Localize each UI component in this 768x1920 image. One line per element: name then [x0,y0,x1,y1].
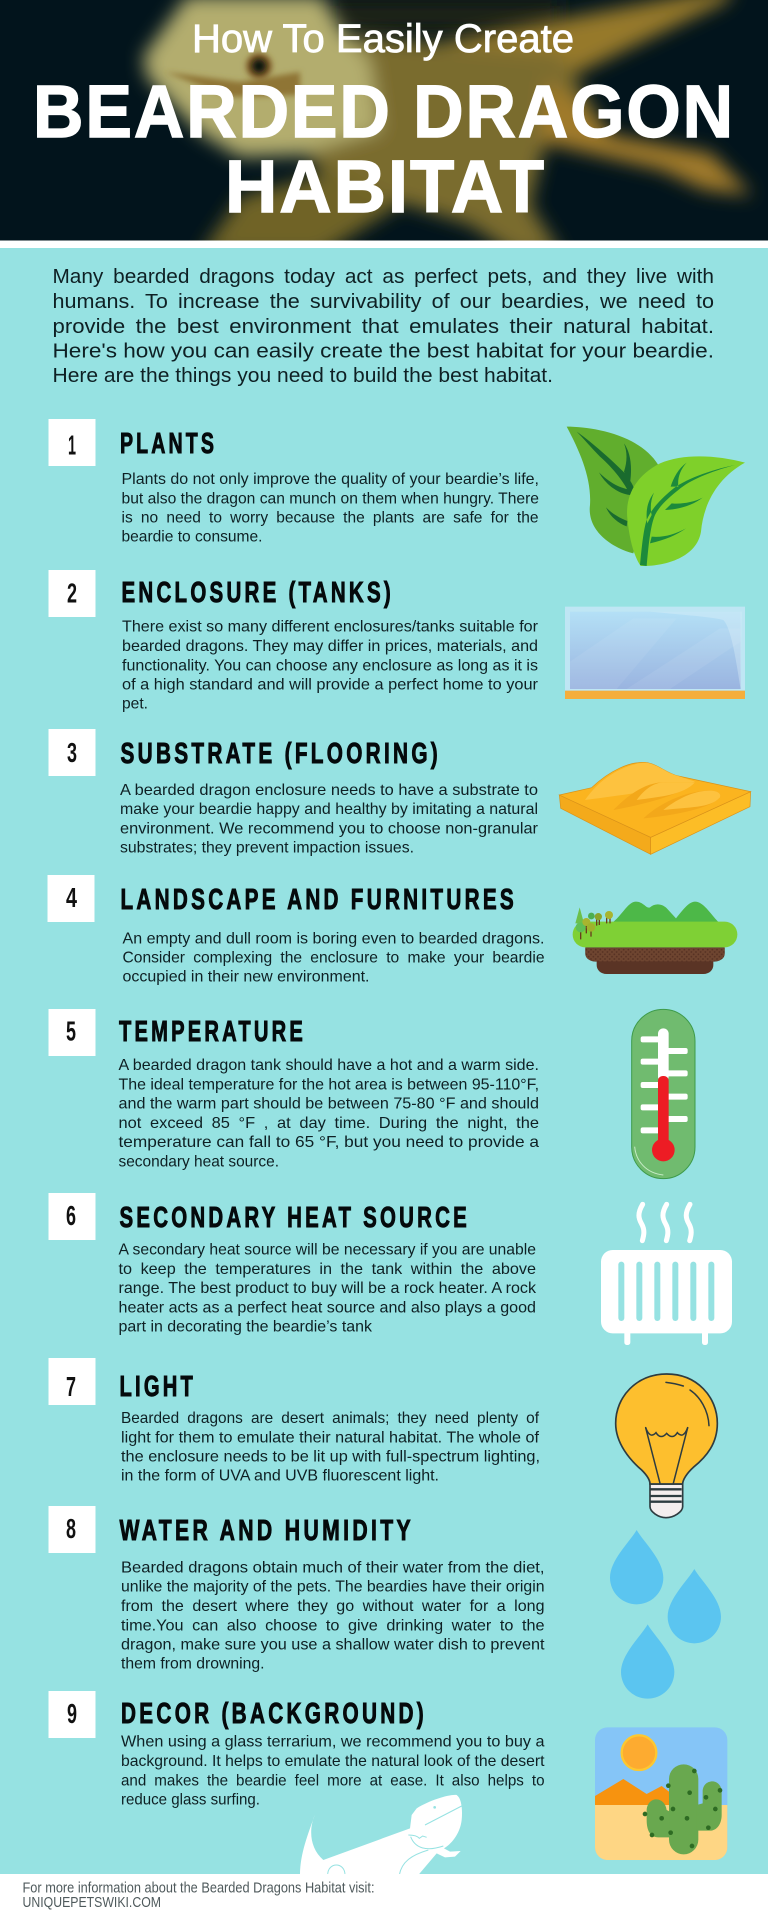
number badge 6 [48,1193,96,1240]
text: landscape: occupied in their new environment. [122,969,370,986]
footer [0,1874,768,1920]
title line 2: HABITAT [225,145,546,228]
heading: light: LIGHT [120,1371,196,1403]
heading: temperature: TEMPERATURE [119,1016,306,1048]
footer note: For more information about the Bearded Dragons Habitat visit: [22,1881,374,1897]
text: secondary heat source: to keep the temperatures in the tank within the above [118,1261,536,1278]
text: plants: is no need to worry because the plants are safe for the [122,509,539,526]
text: water and humidity [121,1559,545,1673]
text: plants: Plants do not only improve the quality of your beardie’s life, [122,471,539,488]
text: decor: and makes the beardie feel more at ease. It also helps to [121,1772,545,1789]
intro paragraph: Here are the things you need to build the best habitat. [52,364,553,387]
number badge 7: 7 [66,1371,76,1402]
heading: landscape: LANDSCAPE AND FURNITURES [120,884,517,916]
white dragon silhouette [300,1795,462,1875]
text: decor [121,1734,545,1808]
text: water and humidity: unlike the majority of the pets. The beardies have their origin [121,1579,544,1596]
title line 1: BEARDED DRAGON [33,70,735,153]
section 5: temperature [48,1009,695,1179]
number badge 9: 9 [67,1698,77,1729]
number badge 2: 2 [67,578,77,609]
section 8: water and humidity [48,1506,721,1699]
text: enclosure: functionality. You can choose any enclosure as long as it is [122,657,538,674]
header white band [0,240,768,248]
section 7: light [48,1358,717,1518]
number badge 3 [48,729,96,776]
text: secondary heat source: A secondary heat source will be necessary if you are unable [118,1242,536,1259]
text: substrate [120,782,539,857]
icon: glass tank [565,607,745,699]
text: light: in the form of UVA and UVB fluorescent light. [121,1467,439,1484]
icon: water drops [610,1530,721,1699]
heading: substrate: SUBSTRATE (FLOORING) [120,738,441,770]
section 4: landscape [48,875,737,986]
text: temperature: temperature can fall to 65 °F, but you need to provide a [118,1134,539,1151]
text: landscape: An empty and dull room is boring even to bearded dragons. [122,930,544,947]
text: water and humidity: Bearded dragons obtain much of their water from the diet, [121,1559,544,1576]
heading: decor: DECOR (BACKGROUND) [121,1698,427,1730]
number badge 4: 4 [66,882,77,913]
number badge 3: 3 [67,737,77,768]
icon: radiator heater [601,1204,732,1345]
subtitle: How To Easily Create [192,17,574,61]
section 2: enclosure [48,570,745,713]
text: plants [122,471,539,545]
text: enclosure: bearded dragons. They may differ in prices, materials, and [122,638,538,655]
text: temperature: The ideal temperature for the hot area is between 95-110°F, [118,1076,539,1093]
text: decor: reduce glass surfing. [121,1791,260,1808]
text: temperature: secondary heat source. [118,1153,279,1170]
number badge 2 [48,570,96,617]
section 6: secondary heat source [48,1193,732,1345]
icon: landscape island [573,902,737,974]
intro paragraph [52,265,714,387]
section 1: plants [48,419,745,566]
text: light: Bearded dragons are desert animals; they need plenty of [121,1410,540,1427]
number badge 4 [48,875,94,922]
text: decor: background. It helps to emulate the natural look of the desert [121,1753,545,1770]
text: water and humidity: from the desert where they go without water for a long [121,1598,544,1615]
text: plants: beardie to consume. [122,528,262,545]
section 9: decor [48,1691,727,1860]
heading: plants: PLANTS [120,428,217,460]
text: secondary heat source: part in decorating the beardie’s tank [118,1318,373,1335]
text: secondary heat source [118,1242,537,1335]
text: secondary heat source: heater acts as a perfect heat source and also plays a good [118,1299,536,1316]
number badge 6: 6 [66,1200,76,1231]
icon: leaves [567,427,745,566]
number badge 9 [48,1691,96,1738]
number badge 7 [48,1358,96,1405]
number badge 8 [48,1506,96,1553]
text: temperature: not exceed 85 °F , at day time. During the night, the [118,1115,539,1132]
icon: desert cactus [595,1727,727,1860]
text: temperature [118,1057,539,1170]
text: light: light for them to emulate their natural habitat. The whole of [121,1429,540,1446]
text: substrate: make your beardie happy and healthy by imitating a natural [120,801,538,818]
heading: water and humidity: WATER AND HUMIDITY [120,1515,414,1547]
footer link: UNIQUEPETSWIKI.COM [22,1895,161,1911]
text: enclosure: of a high standard and will provide a perfect home to your [122,677,539,694]
number badge 8: 8 [66,1513,76,1544]
text: substrate: substrates; they prevent impaction issues. [120,840,414,857]
text: enclosure: There exist so many different enclosures/tanks suitable for [122,619,539,636]
text: water and humidity: time.You can also choose to give drinking water to the [121,1617,545,1634]
text: temperature: A bearded dragon tank should have a hot and a warm side. [118,1057,539,1074]
text: landscape [122,930,545,986]
icon: sand substrate [559,762,751,854]
text: temperature: and the warm part should be between 75-80 °F and should [118,1096,539,1113]
text: water and humidity: them from drowning. [121,1656,264,1673]
intro paragraph: Many bearded dragons today act as perfect pets, and they live with [52,265,714,288]
icon: light bulb [616,1374,717,1518]
heading: enclosure: ENCLOSURE (TANKS) [122,577,394,609]
intro paragraph: provide the best environment that emulates their natural habitat. [52,315,714,338]
text: enclosure [122,619,539,713]
number badge 1: 1 [68,430,76,460]
text: substrate: A bearded dragon enclosure needs to have a substrate to [120,782,538,799]
number badge 1 [48,419,96,466]
text: light: the enclosure needs to be lit up with full-spectrum lighting, [121,1448,540,1465]
text: substrate: environment. We recommend you to choose non-granular [120,820,539,837]
text: enclosure: pet. [122,696,148,713]
intro paragraph: humans. To increase the survivability of our beardies, we need to [52,290,714,313]
intro paragraph: Here's how you can easily create the best habitat for your beardie. [52,340,714,362]
heading: secondary heat source: SECONDARY HEAT SOURCE [120,1202,470,1234]
header banner with blurred dragon photo [0,0,768,255]
text: water and humidity: dragon, make sure you use a shallow water dish to prevent [121,1637,545,1654]
number badge 5 [48,1009,96,1056]
text: secondary heat source: range. The best product to buy will be a rock heater. A rock [118,1280,537,1297]
text: plants: but also the dragon can munch on them when hungry. There [122,490,539,507]
text: landscape: Consider complexing the enclosure to make your beardie [122,950,545,967]
section 3: substrate [48,729,751,857]
text: decor: When using a glass terrarium, we recommend you to buy a [121,1734,545,1751]
number badge 5: 5 [66,1016,76,1047]
text: light [121,1410,540,1484]
icon: thermometer [632,1009,695,1179]
